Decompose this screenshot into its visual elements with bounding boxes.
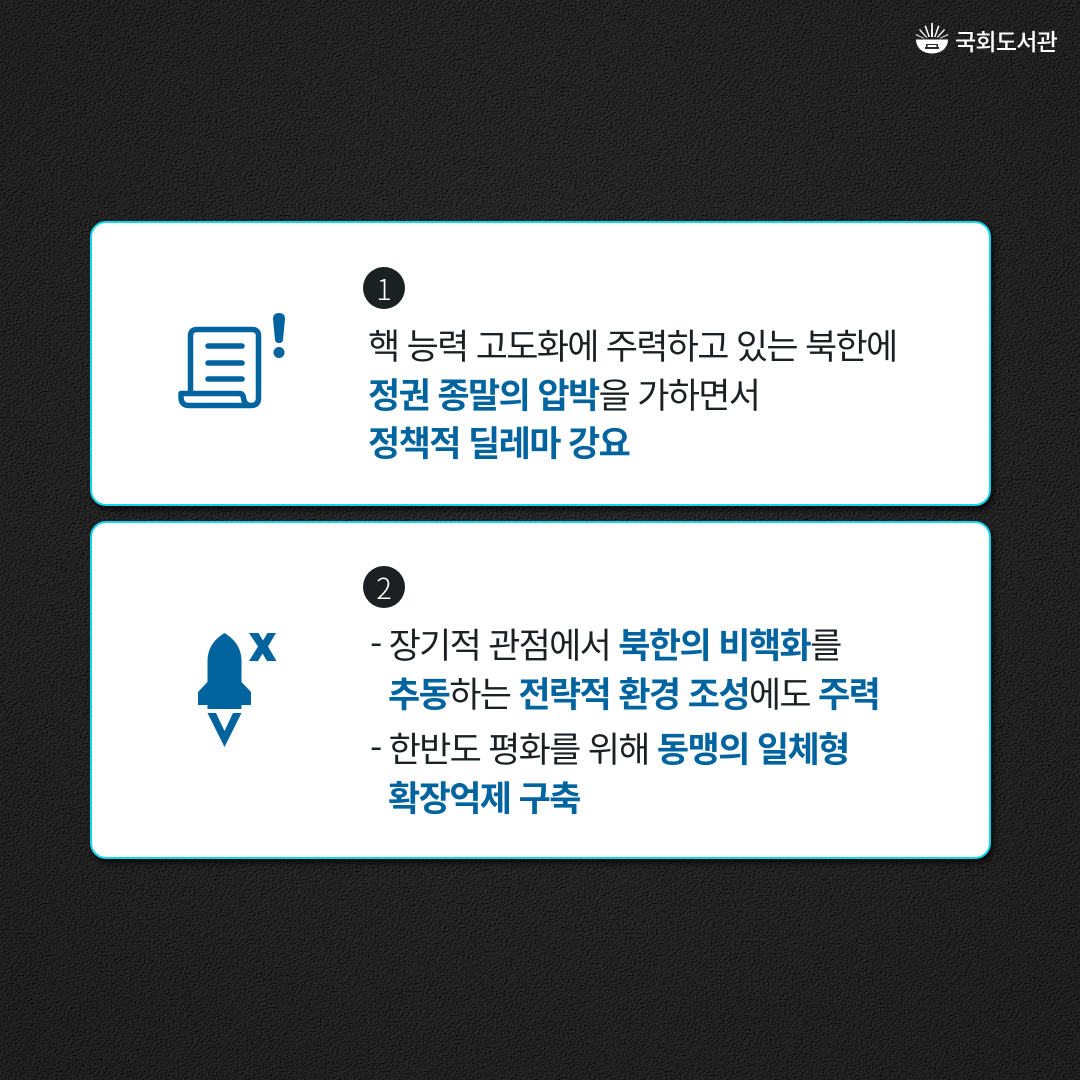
text block: card 1: 정권 종말의 압박을 가하면서: [368, 368, 759, 419]
text block: card 2: 확장억제 구축: [388, 771, 580, 822]
number badge 1: [363, 267, 405, 309]
icon: rocket with x: [198, 633, 276, 747]
panel: card 1: [90, 221, 991, 506]
number badge 2: [363, 566, 405, 608]
logo: National Assembly Library: [916, 23, 1057, 57]
logo text: 국회도서관: [955, 23, 1057, 57]
icon: document with exclamation mark: [178, 313, 285, 408]
number badge 1: 1: [376, 267, 392, 309]
text block: card 1: 정책적 딜레마 강요: [368, 416, 629, 467]
text block: card 2: - 한반도 평화를 위해 동맹의 일체형: [370, 722, 849, 773]
text block: card 1: 핵 능력 고도화에 주력하고 있는 북한에: [368, 319, 897, 370]
icon: library emblem: [916, 23, 948, 54]
panel: card 2: [90, 521, 991, 859]
text block: card 2: [370, 618, 879, 822]
text block: card 2: - 장기적 관점에서 북한의 비핵화를: [370, 618, 841, 669]
text block: card 2: 추동하는 전략적 환경 조성에도 주력: [388, 667, 879, 718]
number badge 2: 2: [376, 566, 392, 608]
text block: card 1: [368, 319, 897, 467]
